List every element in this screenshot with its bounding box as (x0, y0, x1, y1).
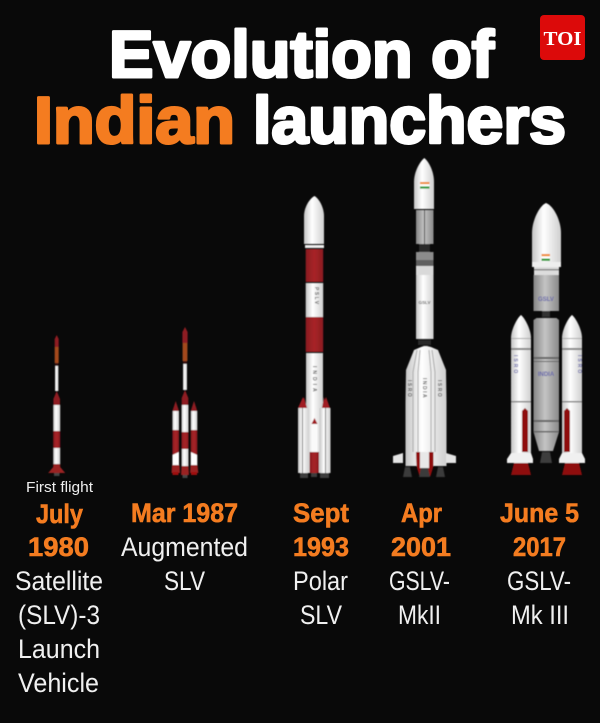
rocket: PSLV: PSLV (313, 287, 319, 306)
icon: Indian flag (420, 182, 430, 189)
label: PSLV: SLV (300, 600, 342, 630)
rocket: GSLV Mk II (393, 158, 456, 477)
label: GSLV Mk III (500, 498, 579, 630)
rocket: PSLV: INDIA (311, 366, 317, 395)
label: SLV-3: Satellite (15, 566, 103, 596)
label: ASLV (121, 498, 248, 596)
label: SLV-3: First flight (26, 479, 94, 496)
label: GSLV Mk II: MkII (398, 600, 441, 630)
label: ASLV: SLV (164, 566, 205, 596)
label: GSLV Mk II: GSLV- (389, 566, 450, 596)
rocket: GSLV Mk II: ISRO (436, 380, 442, 398)
rocket: PSLV (298, 196, 330, 478)
booster: left: ISRO (512, 355, 518, 375)
label: SLV-3: Launch (18, 634, 100, 664)
label: ASLV: Mar 1987 (131, 498, 238, 528)
label: GSLV Mk III: Mk III (511, 600, 569, 630)
rocket: GSLV Mk II: GSLV (419, 300, 430, 305)
icon: TOI logo (540, 15, 585, 60)
label: GSLV Mk II: Apr (401, 498, 442, 528)
booster: right: ISRO (576, 355, 582, 375)
label: PSLV: Sept (293, 498, 349, 528)
title (34, 17, 566, 157)
label: SLV-3: Vehicle (18, 668, 99, 698)
icon: TOI logo: TOI (544, 28, 582, 50)
rocket: ASLV (172, 327, 198, 478)
rocket: SLV-3 (48, 335, 65, 476)
label: GSLV Mk II (389, 498, 451, 630)
label: SLV-3 (15, 479, 103, 698)
label: GSLV Mk III: GSLV- (507, 566, 571, 596)
label: GSLV Mk III: June 5 (500, 498, 579, 528)
booster: right (559, 315, 585, 475)
label: SLV-3: July (36, 499, 83, 529)
booster: left (507, 315, 533, 475)
rocket: GSLV Mk II: INDIA (421, 378, 427, 399)
rocket: GSLV Mk II: ISRO (406, 380, 412, 398)
rocket: GSLV Mk III (507, 203, 585, 475)
rocket: GSLV Mk III: INDIA (538, 372, 555, 378)
label: GSLV Mk II: 2001 (391, 532, 451, 562)
label: GSLV Mk III: 2017 (513, 532, 566, 562)
rocket: GSLV Mk III: GSLV (538, 297, 554, 303)
label: PSLV (293, 498, 349, 630)
label: PSLV: 1993 (293, 532, 349, 562)
label: PSLV: Polar (293, 566, 348, 596)
title: Indian (34, 83, 235, 157)
label: SLV-3: (SLV)-3 (18, 600, 100, 630)
label: ASLV: Augmented (121, 532, 248, 562)
icon: Indian flag (542, 254, 550, 261)
title: Evolution of (109, 17, 495, 91)
label: SLV-3: 1980 (28, 532, 89, 562)
title: launchers (253, 83, 566, 157)
